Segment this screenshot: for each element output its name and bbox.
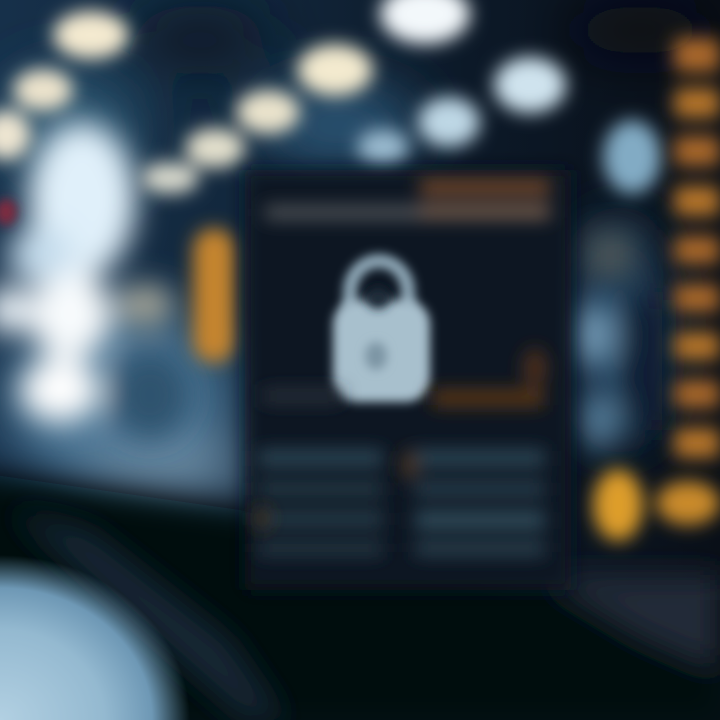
string of lights: blue white — [357, 0, 661, 194]
lower right text block — [255, 450, 545, 555]
floor: base — [0, 600, 720, 720]
orange column at right — [674, 38, 720, 458]
string of lights: cream — [0, 11, 373, 194]
orange pill — [193, 228, 235, 363]
icon: padlock — [333, 261, 430, 402]
red accent — [0, 199, 17, 225]
floor: light streak — [0, 555, 190, 720]
panel: main dark card — [245, 170, 571, 590]
panel heading — [265, 181, 550, 219]
floor: dark band — [0, 470, 720, 720]
right side blue shapes — [577, 230, 662, 450]
divider text line — [262, 348, 547, 406]
floor: dark curve — [10, 510, 285, 720]
lower left text block — [258, 450, 383, 555]
yellow glows at lower right — [593, 469, 720, 541]
left bright column — [0, 122, 190, 440]
background: haze at left — [0, 4, 715, 500]
